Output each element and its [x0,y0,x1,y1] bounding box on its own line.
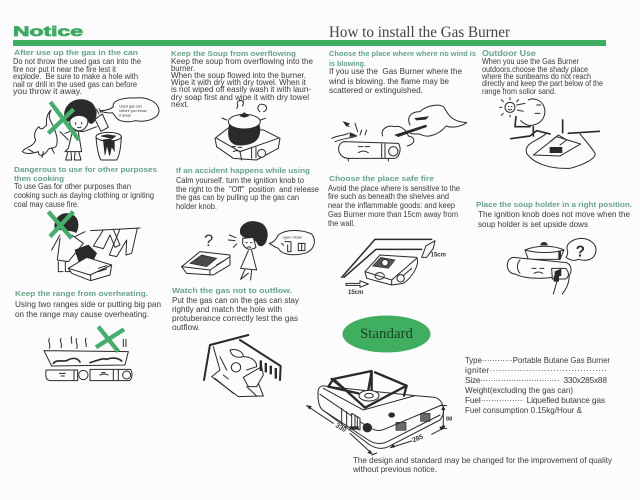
heading: Keep the Soup from overflowing [171,49,296,58]
illustration: pot on stove with hand on knob [507,238,596,294]
body text [481,57,603,96]
body text: holder knob. [176,202,217,211]
body text: outflow. [172,323,200,332]
body text: Calm yourself. turn the ignition knob to [176,176,305,185]
body text [15,299,161,319]
illustration: stove in tree shade with sun [500,98,599,168]
spec list: Fuel consumption 0.15kg/Hour & [465,405,582,415]
body text [13,57,141,96]
body text: range from solior sand. [482,87,556,96]
panel: dangerous to use for other purposes [14,165,157,281]
body text: where the sunbeams do not reach [481,72,591,81]
body text: fire nor put it near the fire lest it [13,65,117,74]
footnote [352,455,613,474]
illustration: stove 15cm from wall [342,239,446,296]
illustration: stove in the wind [332,105,467,161]
badge: Standard: Standard [360,326,414,342]
body text: is not wiped off easily wash it with laun- [171,85,311,94]
heading: Place the soup holder in a right position. [476,200,632,209]
body text: wind is blowing. the flame may be [328,77,449,86]
panel: place the soup holder [476,200,632,294]
footnote: The design and standard may be changed for the improvement of quality [353,455,613,465]
heading: Choose the place where where no wind is [329,49,476,58]
body text: burner. [171,64,195,73]
body text: you throw it away. [13,87,82,96]
body text [172,296,299,332]
illustration: girl throwing can into fire: before you throw [119,109,147,113]
illustration: stove with dimensions: 285 [411,433,425,444]
illustration: two stoves under one big pan [44,327,132,381]
panel: choose the place safe fire [328,174,460,296]
heading: If an accident happens while using [176,166,310,175]
body text: directly and keep the part below of the [482,79,603,88]
illustration: stove 15cm from wall: 15cm [348,290,363,296]
body text: To use Gas for other purposes than [14,182,131,191]
illustration: stove with dimensions [307,371,452,455]
title: Notice: Notice [13,23,83,39]
body text: When you use the Gas Burner [482,57,579,66]
body text: nail or drill in the used gas can before [13,80,137,89]
spec list: Fuel················ Liquefied butance gas [465,395,605,405]
body text [176,176,319,211]
heading: Dangerous to use for other purposes [14,165,157,174]
body text [14,182,154,209]
heading second line: then cooking [14,174,64,183]
body text: If you use the Gas Burner where the [329,67,462,76]
body text: fire such as beneath the shelves and [328,192,449,201]
heading second line: is blowing. [329,59,366,68]
spec list: Type············Portable Butane Gas Burner [465,355,610,365]
illustration: stove 15cm from wall: 15cm [431,253,446,259]
illustration: stove, question mark and worried woman: ? [204,231,213,250]
body text: rightly and match the hole with [172,305,282,314]
body text: on the range may cause overheating. [15,309,149,319]
body text: soup holder is set upside dows [478,219,588,229]
body text: Gas Burner more than 15cm away from [328,210,458,219]
green header bar [13,40,606,46]
body text: outdoors.choose the shady place [482,65,588,74]
spec list: igniter······································· [465,365,607,375]
body text: Put the gas can on the gas can stay [172,296,299,305]
body text: Do not throw the used gas can into the [13,57,141,66]
body text: scattered or extinguished. [329,86,423,95]
body text: the wall. [328,219,355,228]
illustration: drying clothes over stove [48,212,140,281]
panel: keep the range from overheating [15,289,161,381]
illustration: stove with dimensions: 330 [334,422,347,434]
title: How to install the Gas Burner: How to install the Gas Burner [329,24,511,41]
footnote: without previous notice. [352,464,437,474]
body text [478,209,630,229]
panel: choose place with no wind [328,49,476,161]
body text: protuberance correctly lest the gas [172,314,298,323]
heading: Choose the place safe fire [329,174,434,183]
illustration: pot on stove with hand on knob: ? [576,244,585,261]
body text: Keep the soup from overflowing into the [171,57,313,66]
spec list [465,355,610,415]
illustration: girl throwing can into fire [22,98,159,160]
body text: next. [171,100,189,109]
body text: Using two ranges side or putting big pan [15,299,161,309]
badge: Standard [342,316,430,352]
spec list: Weight(excluding the gas can) [465,385,573,395]
body text: When the soup flowed into the burner. [171,71,306,80]
panel: keep the soup from overflowing [171,49,313,160]
illustration: stove, question mark and worried woman: open close [283,235,303,240]
illustration: pot boiling over on stove [215,101,280,160]
heading: Outdoor Use [482,48,536,58]
illustration: stove, question mark and worried woman [182,222,314,280]
body text [328,67,462,95]
body text [328,184,460,228]
heading: After use up the gas in the can [14,48,138,57]
body text: Avoid the place where is sensitive to the [328,184,460,193]
body text: the gas can by pulling up the gas can [176,193,299,202]
body text: The ignition knob does not move when the [478,209,630,219]
body text: dry soap first and wipe it with dry towel [171,93,309,102]
illustration: girl throwing can into fire: it away [119,114,131,118]
heading: Watch the gas not to outflow. [172,286,292,295]
body text: the right to the "Off" position and release [176,185,319,194]
panel: if an accident happens [176,166,319,280]
illustration: stove with dimensions: 88 [446,417,452,423]
body text: cooking such as daying clothing or igniting [14,191,154,200]
body text: near the inflammable goods: and keep [328,201,456,210]
panel: watch the gas not to outflow [172,286,299,397]
illustration: inserting gas can [204,335,281,397]
illustration: girl throwing can into fire: Used gas can [119,104,142,108]
body text: coal may cause fire. [14,200,79,209]
body text [171,57,313,109]
heading: Keep the range from overheating. [15,289,148,298]
panel: outdoor use [481,48,603,168]
spec list: Size······························· 330x285x88 [465,375,607,385]
body text: Wipe it with dry with dry towel. When it [171,78,307,87]
panel: after use up the gas [13,48,159,160]
body text: explode. Be sure to make a hole with [13,72,138,81]
